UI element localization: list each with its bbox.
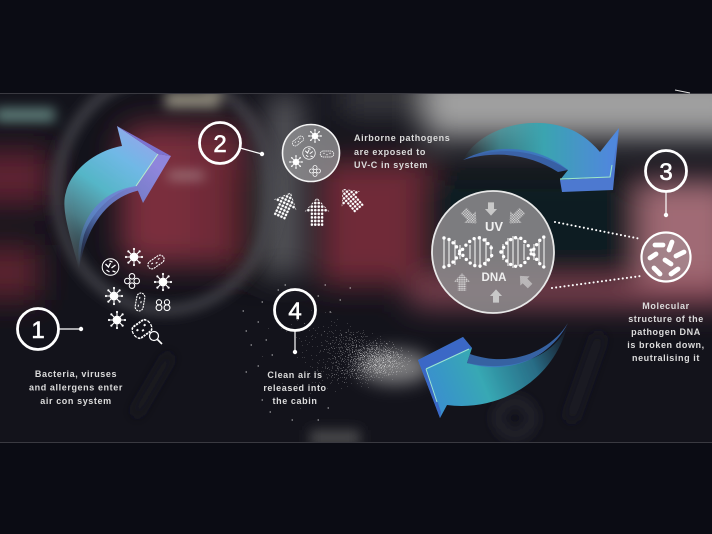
- step 2 text: UV-C in system: [354, 160, 428, 170]
- panel edges: [0, 94, 712, 442]
- step 3 text: pathogen DNA: [631, 327, 701, 337]
- step 3 text: is broken down,: [627, 340, 705, 350]
- step 3 marker: [646, 150, 686, 217]
- steering wheel ring and soft dash shapes: [0, 94, 538, 442]
- step 1 marker: 1: [31, 317, 45, 344]
- step 4 text: released into: [263, 383, 327, 393]
- step 2 text: [354, 133, 450, 170]
- DNA helix: [444, 236, 544, 268]
- pathogen circle: [282, 124, 340, 182]
- dotted arrows up: [268, 181, 369, 226]
- dotted connector lines: [552, 222, 641, 288]
- step 3 text: neutralising it: [632, 353, 700, 363]
- step 1 text: [29, 369, 123, 406]
- pathogen icon cluster: [102, 248, 172, 344]
- clean air particles: [262, 310, 413, 408]
- step 4 text: Clean air is: [267, 370, 323, 380]
- step 2 marker: 2: [213, 131, 227, 158]
- step 2 text: Airborne pathogens: [354, 133, 450, 143]
- blurred car interior photo background: [0, 70, 712, 446]
- step 1 text: and allergens enter: [29, 382, 123, 392]
- DNA circle: [432, 191, 554, 313]
- step 3 text: [627, 301, 705, 363]
- step 4 marker: 4: [288, 298, 302, 325]
- step 1 text: Bacteria, viruses: [35, 369, 117, 379]
- spray cloud glow: [359, 350, 431, 384]
- scattered far particles: [243, 285, 350, 420]
- step 4 text: [263, 370, 327, 406]
- arrow 2: to step 3: [463, 123, 619, 192]
- inward arrows: [454, 205, 535, 291]
- step 4 text: the cabin: [273, 396, 317, 406]
- step 4 marker: [274, 290, 316, 354]
- step 1 text: air con system: [40, 396, 112, 406]
- arrow 3: to step 4: [418, 323, 568, 418]
- step 2 text: are exposed to: [354, 147, 426, 157]
- arrow 1: up to step 2: [64, 126, 171, 270]
- top band: [0, 0, 712, 94]
- DNA circle: DNA: [482, 272, 506, 284]
- DNA circle: UV: [485, 219, 503, 234]
- step 2 marker: [200, 122, 264, 164]
- broken-down pathogen circle: [642, 232, 690, 282]
- bottom band: [0, 442, 712, 534]
- step 3 text: structure of the: [628, 314, 704, 324]
- step 3 marker: 3: [659, 159, 673, 186]
- step 1 marker: [18, 308, 83, 350]
- step 3 text: Molecular: [642, 301, 690, 311]
